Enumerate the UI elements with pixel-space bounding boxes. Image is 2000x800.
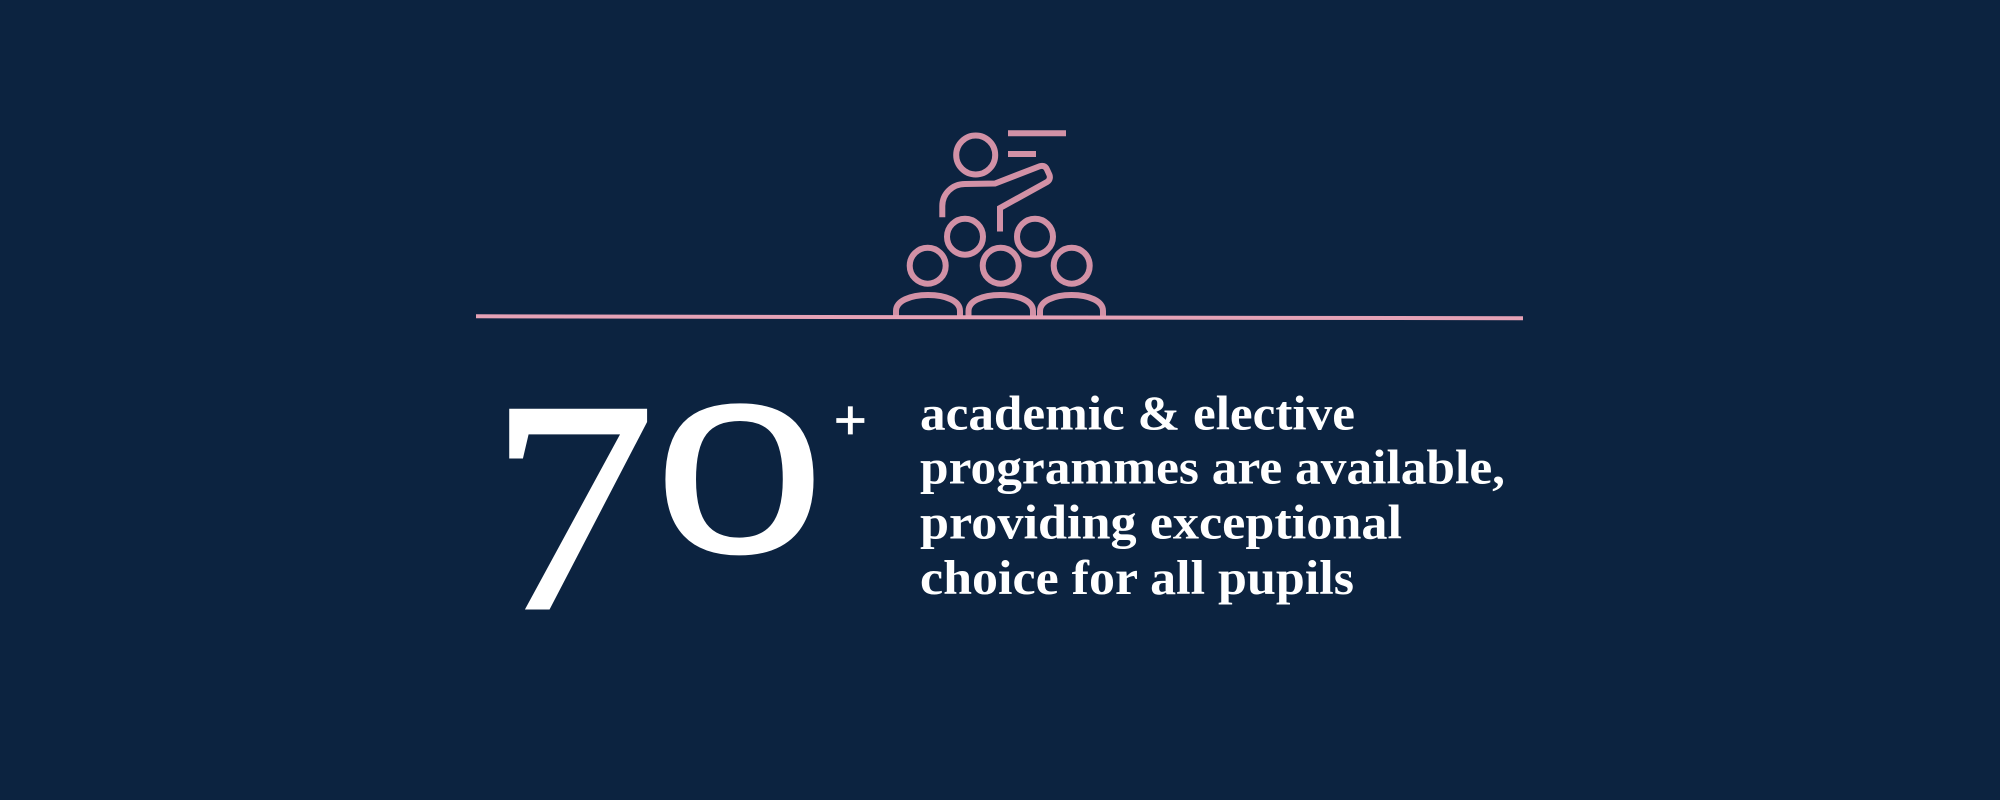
icon: teacher presenting to pupils bbox=[896, 133, 1103, 317]
big number 70 bbox=[489, 339, 823, 674]
presentation line long bbox=[1008, 130, 1066, 136]
pupil head 3 bbox=[910, 248, 946, 284]
line 1: academic & elective bbox=[920, 386, 1355, 440]
digit 7: 7 bbox=[489, 339, 655, 674]
pupil shoulders 1 bbox=[896, 295, 960, 317]
pupil head 5 bbox=[1054, 248, 1090, 284]
line 2: programmes are available, bbox=[920, 440, 1505, 494]
pupil shoulders 2 bbox=[968, 295, 1033, 317]
pupil head 1 bbox=[947, 219, 983, 255]
teacher body and arm bbox=[942, 166, 1050, 232]
pupil shoulders 3 bbox=[1040, 295, 1103, 317]
line 4: choice for all pupils bbox=[920, 550, 1354, 605]
digit 0: 0 bbox=[656, 362, 823, 597]
description text bbox=[920, 386, 1505, 605]
pupil head 2 bbox=[1017, 219, 1053, 255]
teacher head bbox=[956, 136, 995, 174]
presentation line short bbox=[1008, 151, 1036, 157]
divider line bbox=[476, 316, 1523, 318]
plus sign: + bbox=[834, 388, 867, 451]
pupil head 4 bbox=[983, 248, 1019, 284]
line 3: providing exceptional bbox=[920, 494, 1402, 550]
